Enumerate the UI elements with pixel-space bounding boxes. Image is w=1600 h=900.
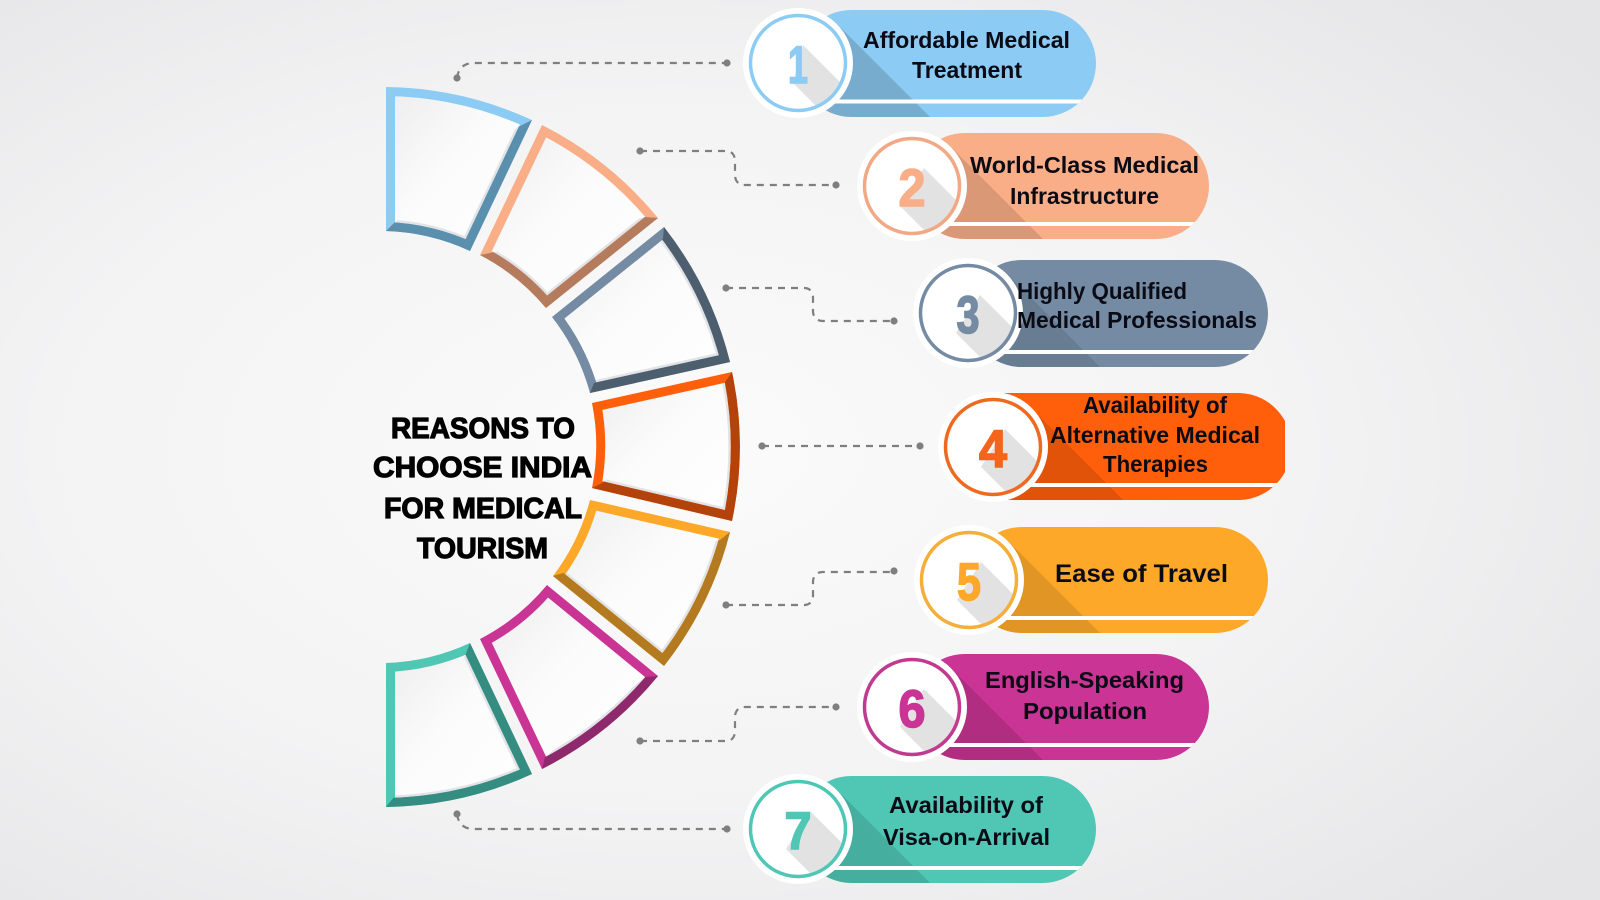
- title: CHOOSE INDIA: [373, 452, 592, 484]
- reason 1 text: [863, 27, 1070, 83]
- number 2: 2: [898, 159, 926, 218]
- segment 6: [480, 585, 658, 769]
- reason 5 text: Ease of Travel: [1055, 560, 1228, 588]
- reason 4 text: [1050, 392, 1260, 477]
- connector 5: [722, 567, 898, 609]
- reason 3 text: Highly Qualified: [1017, 278, 1187, 304]
- reason 4 pill: [944, 392, 1285, 502]
- segment 3: [552, 227, 730, 393]
- connector 1: [453, 59, 731, 82]
- reason 3 text: Medical Professionals: [1017, 307, 1257, 333]
- number 1: 1: [788, 36, 808, 95]
- reason 1 text: Treatment: [912, 57, 1022, 83]
- connector 6: [636, 703, 840, 745]
- reason 5 pill: [914, 526, 1268, 635]
- title: TOURISM: [417, 533, 548, 565]
- arc of seven segments: [386, 87, 740, 807]
- reason 6 text: Population: [1023, 698, 1147, 724]
- title: [373, 413, 592, 565]
- reason 1 text: Affordable Medical: [863, 27, 1070, 53]
- number 6: 6: [898, 680, 926, 739]
- reason 3 text: [1017, 278, 1257, 333]
- number 5: 5: [957, 553, 981, 612]
- reason 4 text: Alternative Medical: [1050, 422, 1260, 448]
- connector 7: [453, 810, 731, 833]
- segment 5: [553, 500, 730, 666]
- number 7: 7: [784, 802, 812, 861]
- reason 1 pill: [743, 8, 1096, 118]
- segment 4: [592, 372, 740, 521]
- connector 2: [636, 147, 840, 189]
- reason 7 text: Availability of: [889, 792, 1043, 818]
- reason 6 pill: [857, 652, 1209, 762]
- reason 7 pill: [743, 774, 1096, 884]
- segment 1: [386, 87, 532, 251]
- segment 7: [386, 643, 532, 807]
- reason 3 pill: [913, 258, 1268, 368]
- reason 2 pill: [857, 131, 1209, 241]
- reason 2 text: [970, 152, 1199, 209]
- reason 2 text: Infrastructure: [1010, 183, 1159, 209]
- connector 4: [758, 442, 924, 450]
- title: REASONS TO: [391, 413, 575, 445]
- reason 4 text: Availability of: [1083, 392, 1227, 418]
- reason 7 text: Visa-on-Arrival: [883, 824, 1050, 850]
- number 4: 4: [979, 420, 1007, 479]
- number 3: 3: [956, 286, 980, 345]
- reason 4 text: Therapies: [1103, 451, 1208, 477]
- segment 2: [480, 125, 658, 308]
- reason 6 text: English-Speaking: [985, 667, 1184, 693]
- reason 6 text: [985, 667, 1184, 724]
- connector 3: [722, 284, 898, 325]
- title: FOR MEDICAL: [384, 493, 582, 525]
- reason 7 text: [883, 792, 1050, 850]
- reason 2 text: World-Class Medical: [970, 152, 1199, 178]
